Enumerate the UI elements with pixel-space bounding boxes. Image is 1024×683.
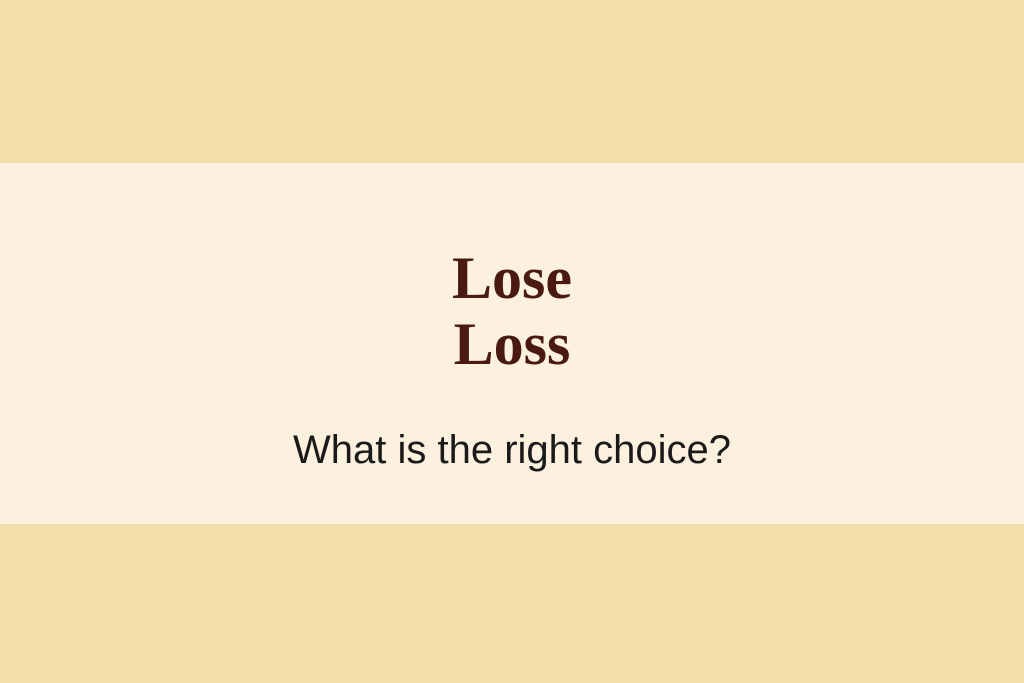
text block: question: What is the right choice? xyxy=(293,428,731,472)
heading: Lose: Lose xyxy=(452,245,572,311)
panel: central light band xyxy=(0,163,1024,524)
heading: Loss: Loss xyxy=(454,311,570,377)
